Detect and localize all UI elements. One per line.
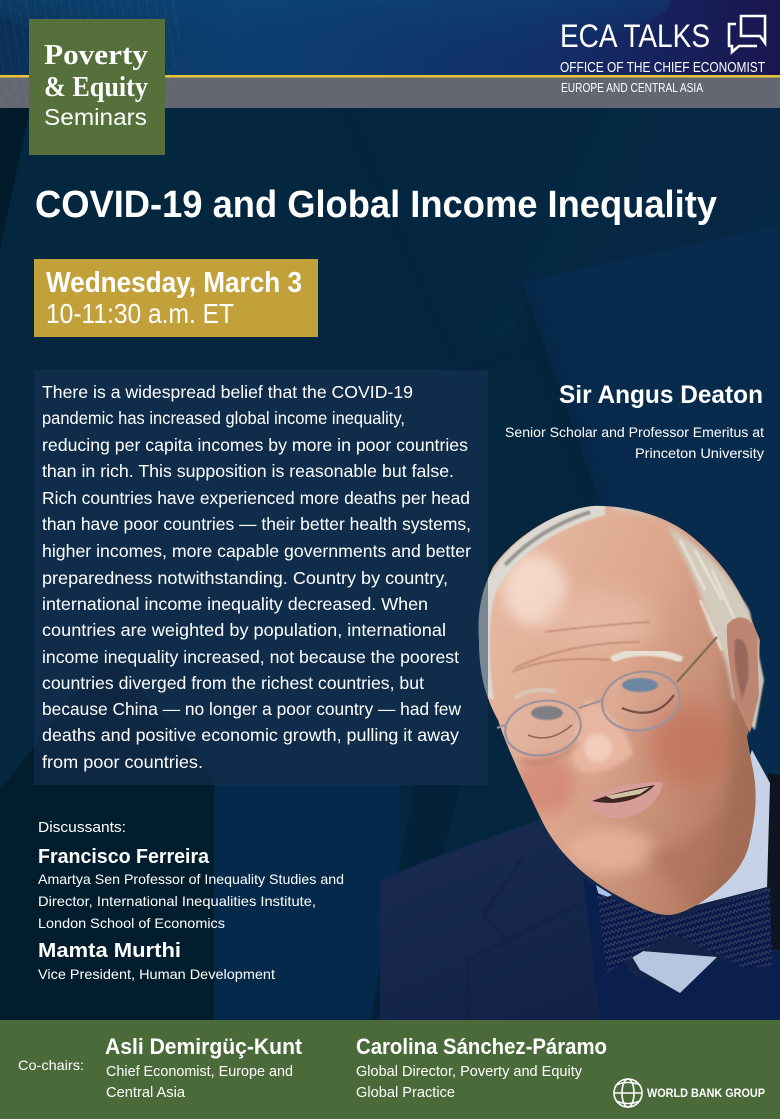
abstract text panel: pandemic has increased global income inequality, xyxy=(42,408,405,428)
ear xyxy=(727,617,759,733)
abstract text panel: income inequality increased, not because the poorest xyxy=(42,647,459,667)
abstract text panel: There is a widespread belief that the COVID-19 xyxy=(42,382,413,402)
abstract text panel: international income inequality decreased. When xyxy=(42,594,428,614)
discussants: Vice President, Human Development xyxy=(38,966,275,982)
discussants: Director, International Inequalities Institute, xyxy=(38,893,316,909)
nose xyxy=(572,700,632,773)
abstract text panel: from poor countries. xyxy=(42,752,203,772)
hair right xyxy=(613,504,770,700)
abstract text panel xyxy=(34,370,488,785)
hair behind and beside head xyxy=(705,560,764,730)
series badge: Poverty & Equity Seminars: Seminars xyxy=(44,104,147,130)
abstract text panel: reducing per capita incomes by more in poor countries xyxy=(42,435,468,455)
ECA Talks branding: EUROPE AND CENTRAL ASIA xyxy=(561,81,704,95)
footer: co-chairs: Central Asia xyxy=(106,1085,186,1101)
discussants xyxy=(38,819,344,982)
date box: 10-11:30 a.m. ET xyxy=(46,298,234,329)
footer: co-chairs: Asli Demirgüç-Kunt xyxy=(105,1034,303,1059)
shirt collar xyxy=(697,750,770,905)
discussants: Discussants: xyxy=(38,819,126,836)
footer: co-chairs xyxy=(0,1020,780,1119)
sweater xyxy=(583,877,780,1020)
date box xyxy=(34,259,318,337)
abstract text panel: than have poor countries — their better health systems, xyxy=(42,514,471,534)
series badge: Poverty & Equity Seminars: & Equity xyxy=(44,71,148,103)
glasses xyxy=(497,637,717,761)
abstract text panel: countries are weighted by population, international xyxy=(42,620,446,640)
header banner xyxy=(0,0,780,108)
abstract text panel: deaths and positive economic growth, pulling it away xyxy=(42,725,459,745)
discussants: Mamta Murthi xyxy=(38,940,181,962)
ECA Talks branding xyxy=(560,16,765,95)
speaker portrait xyxy=(380,500,780,1020)
icon: chat bubbles xyxy=(729,16,765,52)
abstract text panel: preparedness notwithstanding. Country by country, xyxy=(42,568,448,588)
abstract text panel: Rich countries have experienced more deaths per head xyxy=(42,488,470,508)
speaker name and affiliation: Princeton University xyxy=(635,445,764,461)
abstract text panel: higher incomes, more capable governments and better xyxy=(42,541,471,561)
speaker name and affiliation: Senior Scholar and Professor Emeritus at xyxy=(505,424,764,440)
series badge: Poverty & Equity Seminars xyxy=(29,19,165,155)
ECA Talks branding: ECA TALKS xyxy=(560,18,710,54)
icon: World Bank globe xyxy=(614,1079,642,1107)
eyes xyxy=(531,706,563,720)
head xyxy=(475,500,780,915)
mouth xyxy=(587,782,663,818)
logo wordmark: WORLD BANK GROUP xyxy=(647,1086,765,1100)
forehead wrinkles xyxy=(512,622,650,672)
footer: co-chairs: Carolina Sánchez-Páramo xyxy=(356,1034,607,1059)
series badge: Poverty & Equity Seminars: Poverty xyxy=(44,39,149,71)
discussants: Francisco Ferreira xyxy=(38,846,210,868)
bow tie xyxy=(597,887,772,973)
abstract text panel: countries diverged from the richest countries, but xyxy=(42,673,424,693)
abstract text panel: because China — no longer a poor country — had few xyxy=(42,699,461,719)
title: COVID-19 and Global Income Inequality xyxy=(35,184,717,226)
speaker name and affiliation: Sir Angus Deaton xyxy=(559,381,763,409)
eyebrows xyxy=(612,652,682,660)
footer: co-chairs: Co-chairs: xyxy=(18,1057,84,1073)
abstract text panel: than in rich. This supposition is reasonable but false. xyxy=(42,461,454,481)
discussants: London School of Economics xyxy=(38,915,225,931)
jacket xyxy=(380,775,780,1020)
footer: co-chairs: Chief Economist, Europe and xyxy=(106,1064,293,1080)
discussants: Amartya Sen Professor of Inequality Studies and xyxy=(38,871,344,887)
date box: Wednesday, March 3 xyxy=(46,267,302,299)
hair left xyxy=(475,500,605,700)
footer: co-chairs: Global Director, Poverty and Equity xyxy=(356,1064,583,1080)
footer: co-chairs: Global Practice xyxy=(356,1085,455,1101)
speaker name and affiliation xyxy=(505,381,764,461)
